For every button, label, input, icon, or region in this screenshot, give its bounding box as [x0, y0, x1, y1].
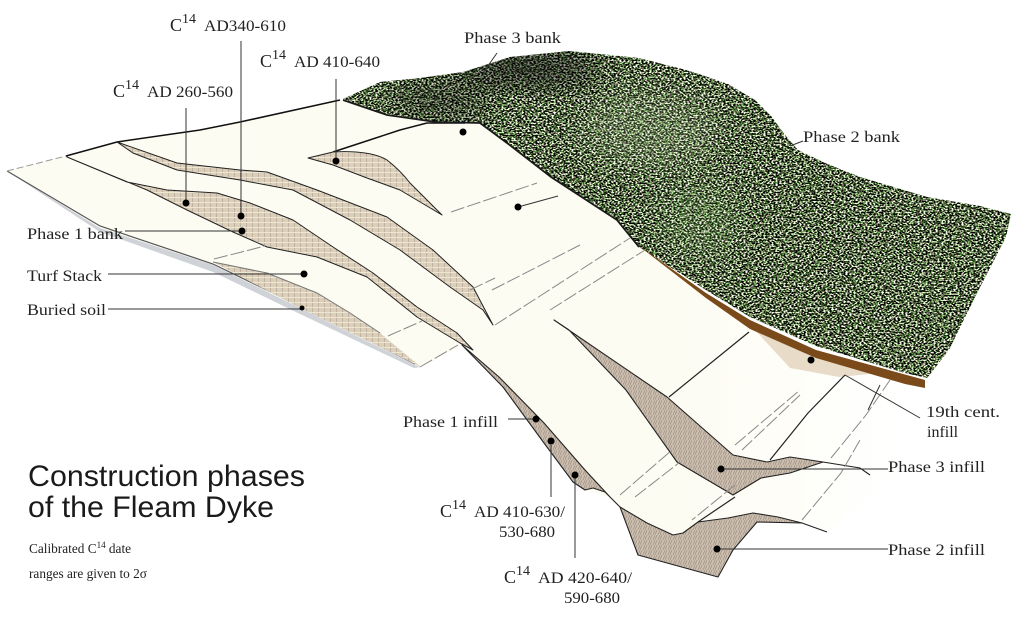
note: date ranges: 14 — [97, 540, 106, 550]
label: C14 AD 410-630/530-680: 530-680 — [499, 524, 555, 541]
note: date ranges: ranges are given to 2σ — [29, 566, 147, 581]
label: C14 AD 420-640/590-680: 14 — [516, 564, 530, 579]
fill: phase 1 bank — [67, 157, 473, 350]
label: C14 AD 410-640: AD 410-640 — [294, 54, 380, 71]
label: C14 AD 410-640 — [260, 48, 380, 71]
label: C14 AD 260-560: 14 — [125, 78, 139, 93]
label: C14 AD 410-630/530-680: 14 — [452, 498, 466, 513]
grass bank — [343, 51, 1011, 378]
fill: turf stack — [213, 262, 421, 367]
label: C14 AD 420-640/590-680: AD 420-640/ — [538, 570, 633, 587]
label: C14 AD 260-560: C — [113, 81, 125, 101]
label: Phase 1 infill: Phase 1 infill — [403, 414, 499, 431]
top edge lines — [66, 100, 465, 156]
label: Phase 3 bank: Phase 3 bank — [464, 30, 561, 47]
label: Phase 2 bank: Phase 2 bank — [803, 129, 900, 146]
label: 19th cent. infill: 19th cent. — [926, 404, 1000, 421]
label: C14 AD 420-640/590-680: C — [504, 567, 516, 587]
label: C14 AD 420-640/590-680 — [504, 564, 633, 607]
title: of the Fleam Dyke — [28, 491, 274, 524]
note: date ranges: date — [106, 541, 131, 556]
label: C14 AD 410-630/530-680: AD 410-630/ — [474, 504, 566, 521]
label: Turf Stack: Turf Stack — [27, 268, 102, 285]
label: C14 AD 410-640: 14 — [272, 48, 286, 63]
label: C14 AD 260-560: AD 260-560 — [147, 84, 233, 101]
sample dots — [182, 128, 814, 552]
label: C14 AD340-610 — [170, 12, 286, 35]
title: Construction phases — [28, 460, 305, 493]
chalk surface — [7, 100, 960, 577]
fill: phase 1 infill — [462, 345, 610, 497]
label: 19th cent. infill — [926, 404, 1000, 441]
label: C14 AD340-610: AD340-610 — [204, 18, 286, 35]
structural lines — [669, 332, 845, 522]
fill: phase 3 bank core — [308, 152, 442, 215]
label: Phase 1 bank: Phase 1 bank — [27, 226, 123, 243]
label: C14 AD 260-560 — [113, 78, 233, 101]
brown soil band and bank outline — [343, 100, 925, 388]
note: date ranges — [29, 540, 147, 581]
fill: 19th century infill — [753, 328, 880, 377]
label: C14 AD 410-630/530-680: C — [440, 501, 452, 521]
fill: phase 2 infill — [620, 507, 802, 577]
fill: phase 3 infill — [554, 320, 823, 495]
buried soil strip — [7, 156, 421, 368]
label: C14 AD340-610: C — [170, 15, 182, 35]
fill: upper phase 1 layer — [117, 142, 493, 325]
title — [28, 460, 305, 524]
label: C14 AD 410-640: C — [260, 51, 272, 71]
note: date ranges: Calibrated C — [29, 541, 97, 556]
leader lines — [108, 41, 920, 558]
label: Phase 2 infill: Phase 2 infill — [888, 542, 986, 559]
label: Buried soil: Buried soil — [27, 302, 107, 319]
label: Phase 3 infill: Phase 3 infill — [888, 459, 986, 476]
label: 19th cent. infill: infill — [927, 424, 959, 441]
dashed section lines — [214, 183, 890, 520]
label: C14 AD 410-630/530-680 — [440, 498, 566, 541]
panel: earthwork cross-section — [7, 100, 960, 577]
label: C14 AD 420-640/590-680: 590-680 — [564, 590, 620, 607]
label: C14 AD340-610: 14 — [182, 12, 196, 27]
